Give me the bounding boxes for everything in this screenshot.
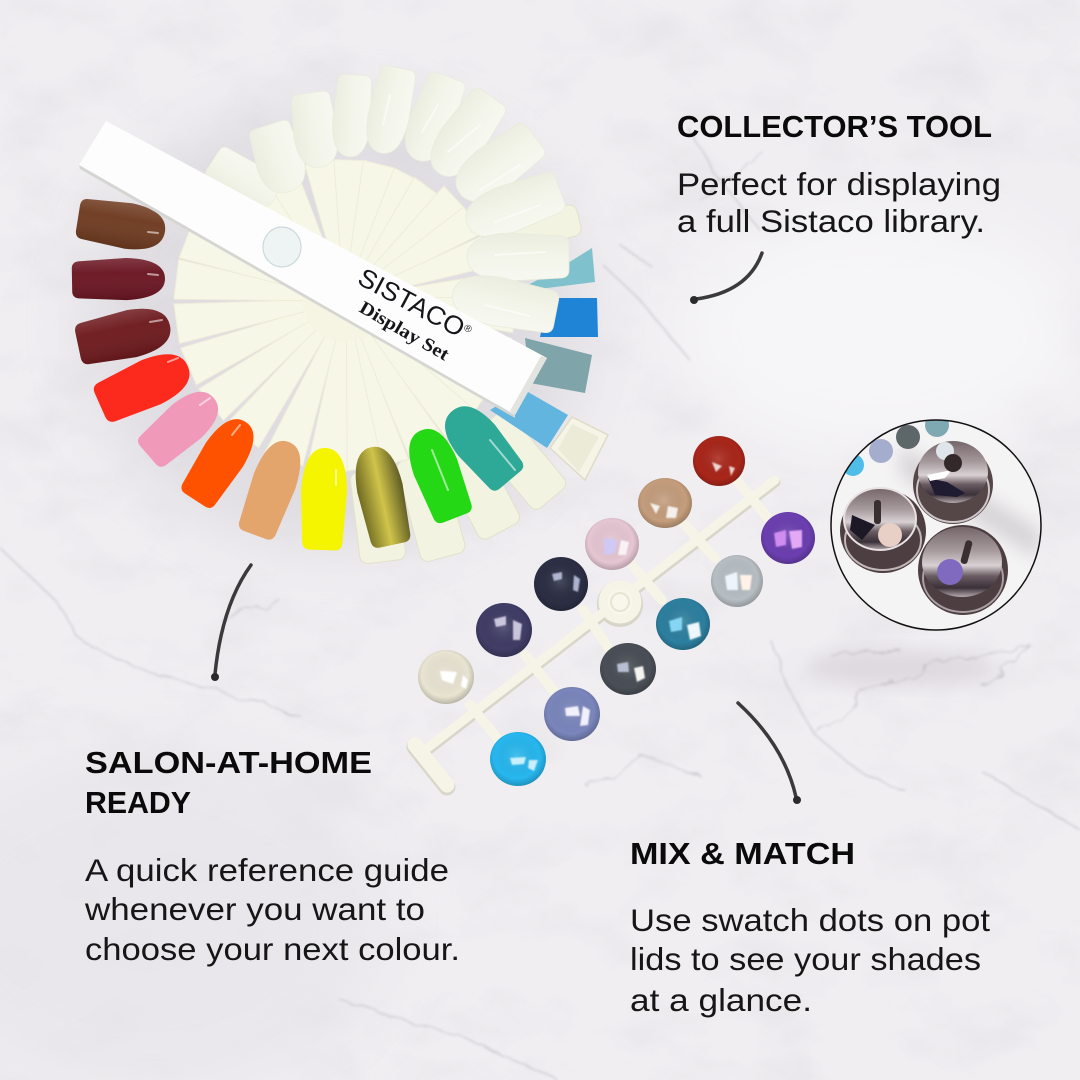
body: Use swatch dots on pot — [630, 902, 990, 938]
body: Perfect for displaying — [677, 166, 1001, 202]
inset dot: sky — [846, 456, 864, 476]
colour nail: orange — [176, 410, 264, 512]
colour nail: gold — [234, 434, 310, 543]
swatch dot: teal holo — [656, 598, 710, 650]
stick brand text: ® — [462, 323, 474, 336]
nail highlights — [148, 95, 545, 490]
rail shadow — [415, 482, 775, 787]
swatch dot: periwinkle glitter — [544, 687, 600, 741]
body: at a glance. — [630, 982, 812, 1018]
body: a full Sistaco library. — [677, 203, 985, 239]
body: choose your next colour. — [85, 931, 460, 967]
body: whenever you want to — [84, 891, 425, 927]
grey teal nail — [525, 338, 592, 393]
blue glitter nail — [540, 298, 598, 337]
inset photo: pot lids — [831, 413, 1041, 630]
swatch dot: cream — [418, 650, 474, 704]
body — [84, 852, 460, 967]
swatch dot: violet — [761, 512, 815, 564]
swatch dot: red — [693, 436, 745, 486]
colour nail: pink — [134, 381, 228, 472]
lid top — [913, 441, 993, 524]
inset dot: teal — [925, 420, 949, 437]
arrow: to salon-at-home — [211, 565, 251, 681]
inset dot: charcoal — [896, 425, 920, 449]
gel swatch dot stick — [415, 436, 815, 787]
stick sub text: Display Set — [356, 298, 453, 366]
swatch dot: charcoal — [600, 643, 656, 695]
arrow: to mix & match — [738, 703, 801, 804]
swatch dot: navy — [534, 557, 588, 611]
body: A quick reference guide — [85, 852, 449, 888]
body: lids to see your shades — [630, 941, 981, 977]
text block: mix and match — [630, 836, 990, 1018]
body — [630, 902, 990, 1018]
display stick — [79, 121, 547, 418]
stick brand text: SISTACO — [353, 262, 466, 341]
text block: collector's tool — [677, 109, 1001, 239]
light teal nail — [515, 248, 595, 292]
tray end behind wheel — [550, 417, 608, 480]
colour nail: yellow — [299, 447, 349, 551]
body — [677, 166, 1001, 239]
swatch dot: silver holo — [711, 555, 763, 607]
blank natural nails — [202, 64, 569, 337]
lid left — [840, 488, 926, 573]
swatch dot: pink — [585, 518, 639, 570]
swatch dot: gold — [638, 478, 692, 528]
sky blue nail — [490, 392, 568, 448]
arrow: to collector's tool — [690, 253, 762, 304]
text block: salon-at-home — [84, 745, 460, 967]
colour nail: red — [90, 344, 197, 427]
heading — [85, 745, 372, 820]
blank plastic stems — [174, 159, 516, 471]
inset dot: periwinkle — [869, 439, 893, 463]
colour nail: oxblood — [73, 302, 175, 368]
swatch dot: dusky purple — [476, 603, 532, 657]
colour nail: dark red — [72, 257, 165, 301]
colour nail: brown — [74, 195, 169, 255]
colour nail: green — [400, 422, 477, 526]
wheel shadow — [80, 100, 590, 550]
hidden-side colour nails — [490, 248, 598, 448]
heading: COLLECTOR’S TOOL — [677, 109, 992, 144]
colour nail: olive chrome — [349, 442, 415, 550]
bottom blank tips — [350, 203, 583, 564]
lid right — [918, 525, 1008, 615]
swatch dot: sky blue — [490, 732, 546, 786]
heading: READY — [85, 785, 191, 820]
colour nail: teal — [434, 396, 528, 495]
heading: SALON-AT-HOME — [85, 745, 372, 780]
heading: MIX & MATCH — [630, 836, 855, 871]
stick rail — [415, 480, 775, 785]
stick button — [263, 227, 301, 267]
nail swatch wheel — [72, 64, 608, 564]
